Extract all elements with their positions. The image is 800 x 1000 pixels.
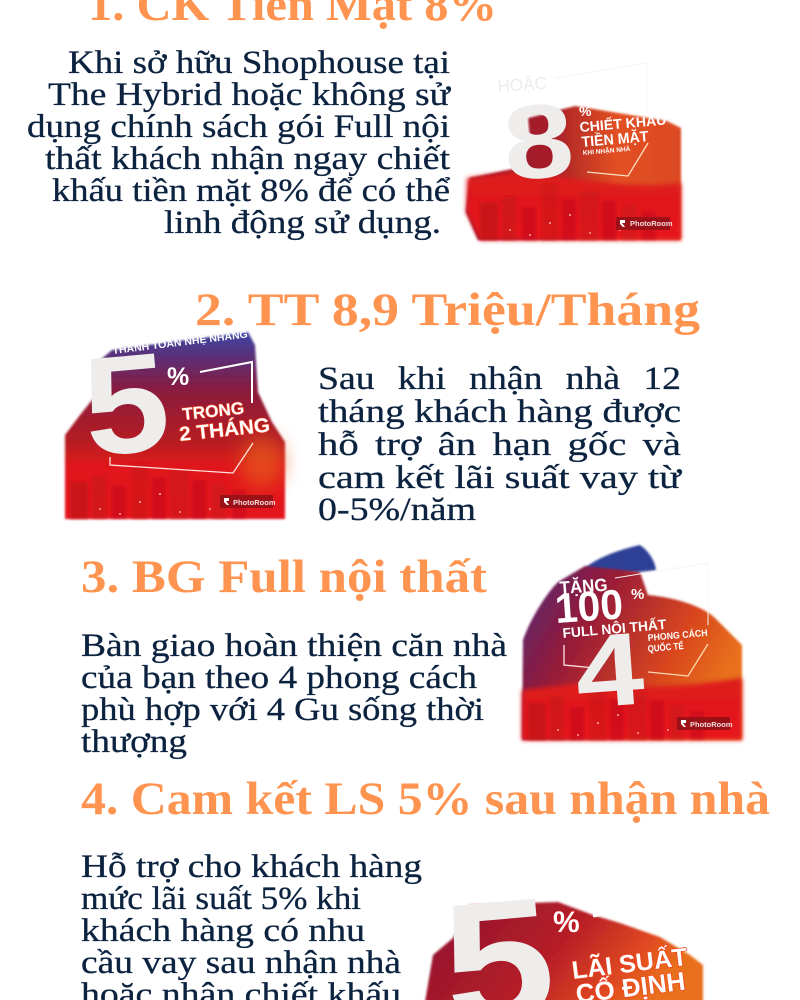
image: 100% full furniture: % <box>631 586 644 603</box>
text block 4: khách hàng có nhu <box>81 913 365 949</box>
image: 8% cash discount <box>466 63 681 240</box>
text block 2: tháng khách hàng được <box>318 394 681 430</box>
image: 5% fixed interest: LÃI SUẤT <box>570 941 689 985</box>
text block 1: dụng chính sách gói Full nội <box>27 109 450 145</box>
image: 8% cash discount: % <box>579 103 592 119</box>
text block 1: linh động sử dụng. <box>164 205 441 241</box>
image: 5% in 2 months: 5 <box>77 322 175 486</box>
text block 4: Hỗ trợ cho khách hàng <box>81 849 422 885</box>
image: 5% in 2 months: PhotoRoom <box>233 498 276 507</box>
image: 5% in 2 months <box>65 322 285 519</box>
image: 100% full furniture: 100 <box>553 580 624 632</box>
text block 4 <box>81 849 422 1000</box>
text block 3: phù hợp với 4 Gu sống thời <box>81 692 484 728</box>
image: 8% cash discount: 8 <box>499 81 577 203</box>
text block 4: mức lãi suất 5% khi <box>81 881 361 917</box>
image: 100% full furniture: QUỐC TẾ <box>647 640 684 655</box>
image: 8% cash discount: KHI NHẬN NHÀ <box>582 144 631 157</box>
image: 8% cash discount: TIỀN MẶT <box>581 128 649 151</box>
image: 100% full furniture: 4 <box>572 610 647 730</box>
text block 1: The Hybrid hoặc không sử <box>48 77 451 113</box>
image: 5% fixed interest: % <box>553 906 580 939</box>
image: 100% full furniture: FULL NỘI THẤT <box>562 615 667 641</box>
image: 5% in 2 months: TRONG <box>181 399 245 424</box>
image: 100% full furniture <box>522 545 742 740</box>
image: 5% in 2 months: THANH TOÁN NHẸ NHÀNG <box>112 327 249 357</box>
image: 100% full furniture: TẶNG <box>559 574 608 598</box>
text block 3: thượng <box>81 724 187 760</box>
text block 3: của bạn theo 4 phong cách <box>81 660 478 696</box>
text block 1: thất khách nhận ngay chiết <box>45 141 450 177</box>
text block 2: cam kết lãi suất vay từ <box>318 460 682 496</box>
text block 3: Bàn giao hoàn thiện căn nhà <box>81 628 507 664</box>
text block 2 <box>318 361 682 528</box>
image: 100% full furniture: PhotoRoom <box>690 720 733 729</box>
image: 8% cash discount: HOẶC <box>497 74 547 96</box>
image: 8% cash discount: PhotoRoom <box>630 219 673 228</box>
text block 2: hỗ trợ ân hạn gốc và <box>318 427 681 463</box>
image: 5% in 2 months: % <box>167 363 189 391</box>
image: 5% fixed interest <box>425 861 703 1000</box>
text block 1: khấu tiền mặt 8% để có thể <box>52 173 450 209</box>
heading 2: 2. TT 8,9 Triệu/Tháng <box>195 284 701 336</box>
heading 3: 3. BG Full nội thất <box>81 551 487 603</box>
image: 100% full furniture: PHONG CÁCH <box>647 628 708 644</box>
text block 1: Khi sở hữu Shophouse tại <box>68 45 450 81</box>
text block 2: Sau khi nhận nhà 12 <box>318 361 681 397</box>
text block 1 <box>27 45 451 241</box>
heading 4: 4. Cam kết LS 5% sau nhận nhà <box>81 773 770 825</box>
text block 2: 0-5%/năm <box>318 492 476 528</box>
image: 8% cash discount: CHIẾT KHẤU <box>579 111 667 135</box>
text block 4: cầu vay sau nhận nhà <box>81 945 401 981</box>
image: 5% in 2 months: 2 THÁNG <box>178 414 271 446</box>
text block 3 <box>81 628 507 760</box>
